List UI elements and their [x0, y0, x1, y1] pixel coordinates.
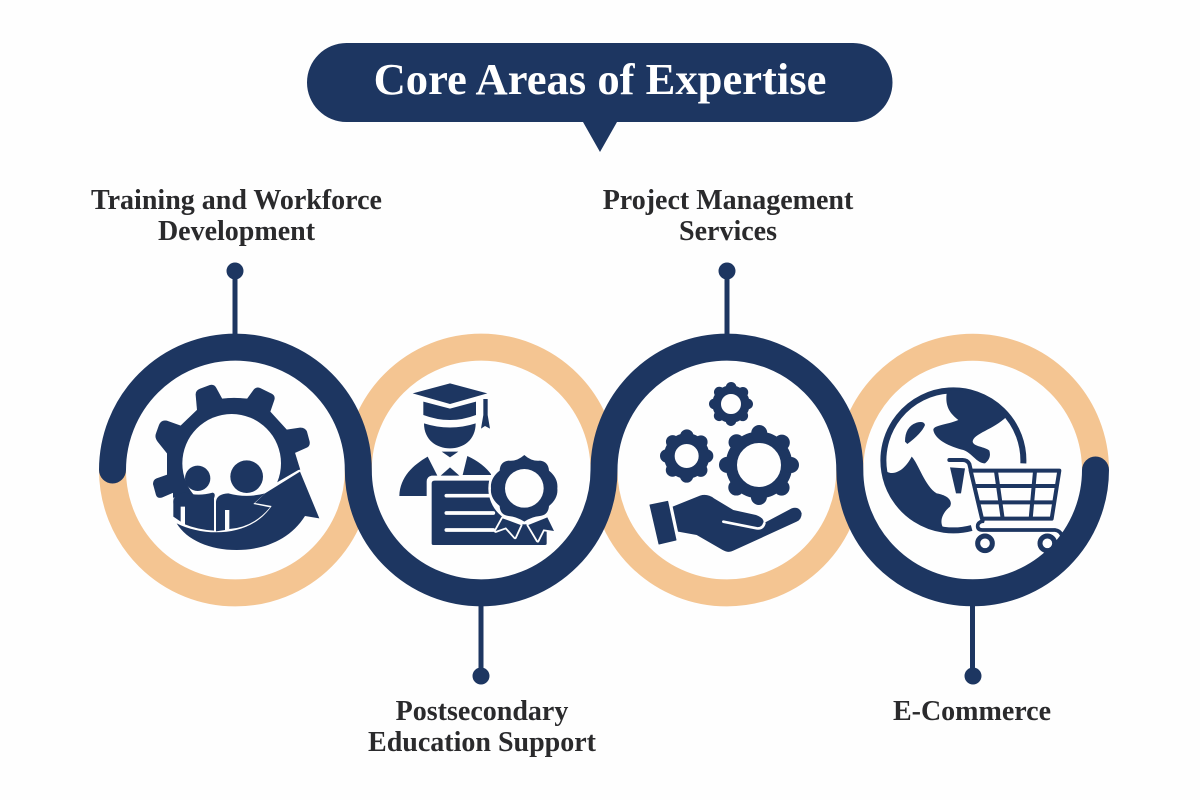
- label: project management services: Project Management: [603, 185, 854, 216]
- connector: project management: [718, 262, 736, 335]
- connector: e-commerce: [964, 604, 982, 684]
- label: training and workforce development: Development: [158, 216, 316, 247]
- label: postsecondary education support: Education Support: [368, 727, 597, 758]
- label: project management services: [603, 185, 854, 247]
- label: project management services: Services: [679, 216, 777, 247]
- icon: graduate with certificate: [399, 383, 560, 545]
- label: training and workforce development: [91, 185, 382, 247]
- orange ring segments: [112, 347, 1096, 593]
- label: e-commerce: E-Commerce: [893, 696, 1051, 727]
- icon: globe with shopping cart: [883, 390, 1062, 551]
- title banner: Core Areas of Expertise: [374, 54, 826, 104]
- label: training and workforce development: Training and Workforce: [91, 185, 382, 216]
- label: postsecondary education support: [368, 696, 597, 758]
- connector: postsecondary: [472, 604, 490, 684]
- title banner: [307, 43, 892, 152]
- label: postsecondary education support: Postsecondary: [396, 696, 568, 727]
- connector: training: [226, 262, 244, 335]
- icon: gear with people and arrow: [153, 384, 320, 550]
- navy wave ring: [112, 347, 1096, 593]
- icon: gears and open hand: [650, 387, 802, 552]
